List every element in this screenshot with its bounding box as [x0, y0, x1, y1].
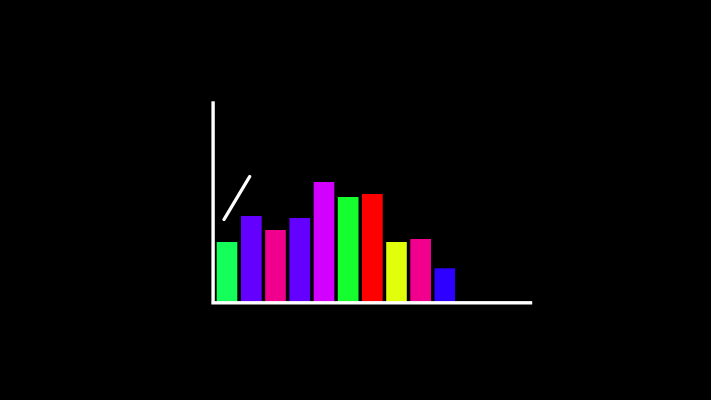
bar 5: magenta — [314, 182, 334, 302]
bar 4: violet — [289, 218, 310, 302]
x axis — [211, 301, 532, 304]
bar 9: pink — [410, 239, 431, 302]
diagonal stroke — [224, 176, 250, 220]
bar 6: green — [338, 197, 358, 302]
bar 3: pink — [265, 230, 286, 302]
bar 1: green — [217, 242, 237, 302]
bars — [217, 182, 455, 302]
bar 7: red — [362, 194, 383, 302]
bar 8: yellow — [386, 242, 407, 302]
bar 2: violet — [241, 216, 262, 302]
bar 10: blue — [434, 268, 455, 302]
y axis — [211, 101, 215, 304]
